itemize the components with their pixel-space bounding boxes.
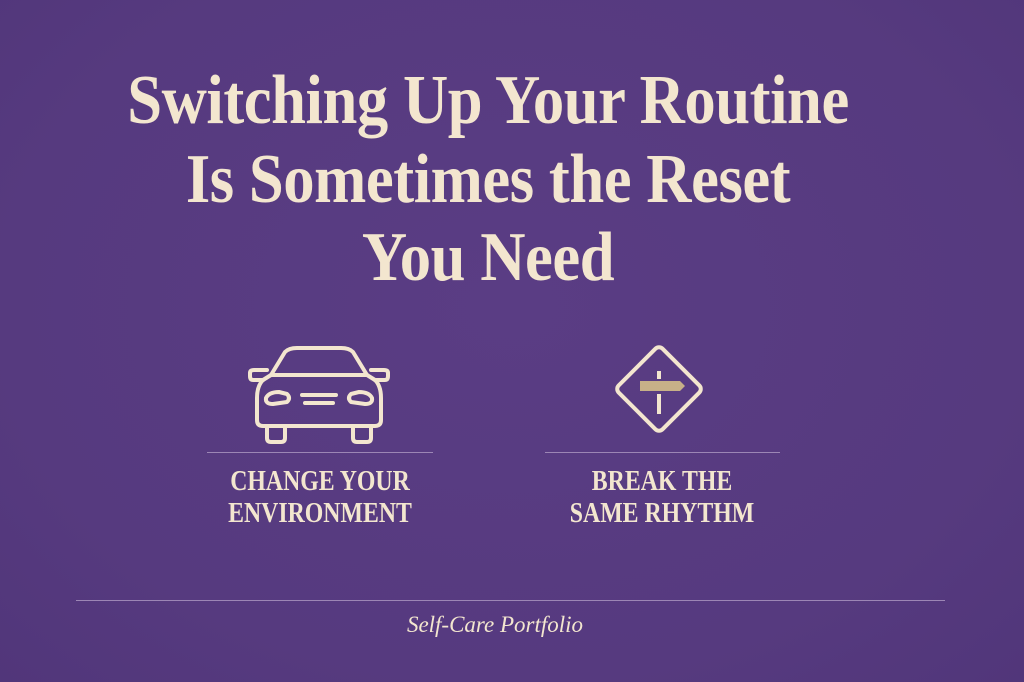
title: You Need: [362, 219, 614, 296]
title: [127, 62, 849, 296]
label: change your environment: ENVIRONMENT: [228, 498, 412, 529]
label: break the same rhythm: [570, 466, 754, 529]
label: change your environment: [228, 466, 412, 529]
icon: car: [248, 346, 390, 444]
label: change your environment: CHANGE YOUR: [230, 466, 410, 497]
icon: road sign: [615, 345, 703, 433]
title: Is Sometimes the Reset: [186, 141, 790, 218]
label: break the same rhythm: BREAK THE: [592, 466, 732, 497]
footer: Self-Care Portfolio: [407, 612, 583, 637]
title: Switching Up Your Routine: [127, 62, 849, 139]
label: break the same rhythm: SAME RHYTHM: [570, 498, 754, 529]
